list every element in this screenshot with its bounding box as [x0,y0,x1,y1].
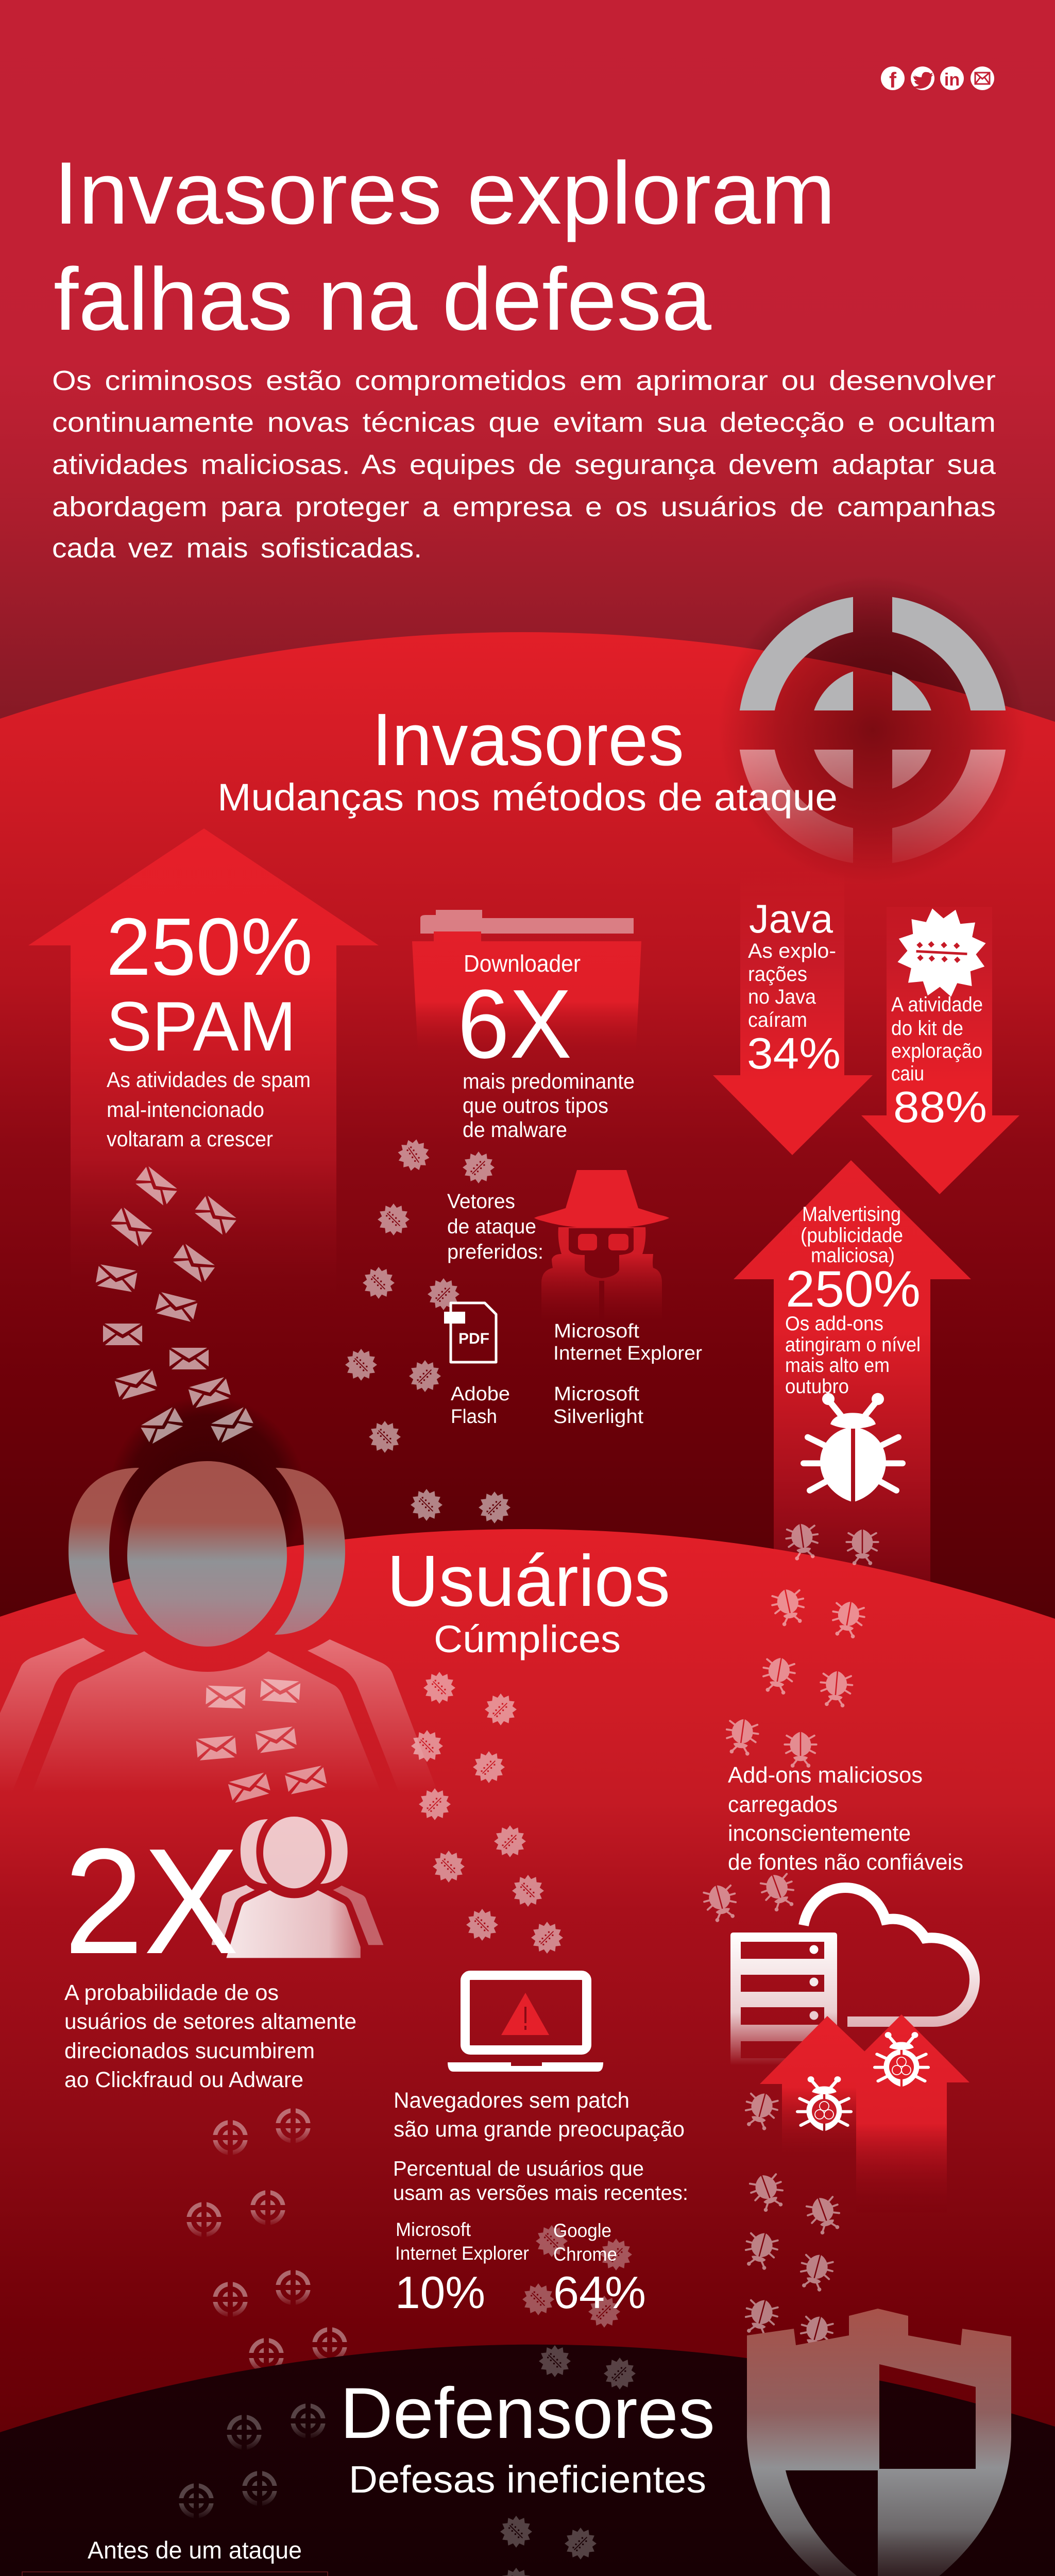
add-ons text: carregados [728,1792,838,1817]
malvertising stat: 250% [786,1260,921,1317]
java stat: As explo- [748,940,836,962]
background: top section [0,0,1055,773]
intro paragraph: atividades maliciosas. As equipes de segurança devem adaptar sua [52,449,996,480]
attack vectors text: preferidos: [447,1241,543,1263]
shadow behind user head [109,1396,305,1592]
small targets: defenders section [179,2403,326,2518]
bug behind shield [796,2313,836,2355]
browsers text: Percentual de usuários que [393,2157,644,2180]
arrow: java down [713,871,873,1155]
browsers text: usam as versões mais recentes: [393,2181,688,2205]
heading: Invasores: Invasores [372,698,684,781]
add-ons text: inconscientemente [728,1821,911,1846]
add-ons text [728,1762,963,1875]
browsers text: 64% [553,2267,646,2318]
spam stat: SPAM [106,987,296,1065]
viruses: defenders section [500,2345,636,2576]
downloader stat [457,950,635,1142]
malvertising stat: mais alto em [785,1354,890,1377]
panel: before attack [22,2536,328,2576]
icon: hacker [534,1170,669,1322]
browsers text [393,2088,688,2318]
social icons top: in [944,70,960,90]
heading: Usuários: Usuários [387,1540,670,1621]
stat: 2X: ao Clickfraud ou Adware [64,2067,303,2092]
target shadow on dark background [718,575,1027,885]
icon: biohazard bug A [797,2076,851,2131]
add-ons text: de fontes não confiáveis [728,1850,963,1875]
intro paragraph: Os criminosos estão comprometidos em aprimorar ou desenvolver [52,365,996,396]
downloader stat: mais predominante [463,1069,635,1093]
icon: crosshair target [740,597,1006,863]
icon: small user figure [212,1817,383,1958]
malvertising stat: (publicidade [801,1224,903,1247]
title: falhas na defesa [54,250,711,349]
intro paragraph [52,365,996,564]
spam stat: voltaram a crescer [107,1127,273,1151]
arrow: spam up [28,828,379,1298]
heading: Invasores: Mudanças nos métodos de ataque [217,776,838,819]
malvertising stat [785,1203,921,1398]
browsers text: Chrome [553,2244,617,2265]
browsers text: Internet Explorer [395,2243,529,2264]
exploit kit stat: 88% [893,1083,987,1132]
attack vectors text: Microsoft [554,1383,639,1405]
heading: before: Antes de um ataque [88,2536,302,2564]
bugs: users section [701,1522,878,2339]
icon: folder [412,910,641,1059]
browsers text: Microsoft [396,2219,471,2240]
background: users dome [0,1529,1055,2452]
stat: 2X: direcionados sucumbirem [64,2039,315,2063]
attack vectors text [447,1190,702,1428]
envelopes: spam trail [95,1165,254,1445]
add-ons text: Add-ons maliciosos [728,1762,923,1788]
browsers text: 10% [395,2267,485,2318]
heading: Invasores [217,698,838,819]
java stat: caíram [748,1009,807,1031]
malvertising stat: atingiram o nível [785,1334,921,1356]
target shadow on dome [718,575,1027,885]
stat: 2X: usuários de setores altamente [64,2009,356,2034]
attack vectors text: Microsoft [554,1320,639,1342]
viruses: users section [411,1672,563,1954]
exploit kit stat [891,993,987,1132]
malvertising stat: maliciosa) [811,1244,895,1267]
icon: pdf file [444,1303,496,1362]
stat: 2X: A probabilidade de os [64,1980,279,2005]
downloader stat: Downloader [464,950,581,977]
java stat: no Java [748,986,816,1008]
java stat [747,896,841,1078]
attack vectors text: Silverlight [553,1406,643,1428]
malvertising stat: outubro [785,1376,849,1398]
malvertising stat: Os add-ons [785,1313,883,1335]
icon: server and cloud [730,1888,975,2065]
intro paragraph: continuamente novas técnicas que evitam sua detecção e ocultam [52,407,996,438]
title: Invasores exploram [54,144,836,243]
heading: Usuários: Cúmplices [434,1618,621,1660]
downloader stat: de malware [463,1117,567,1142]
heading: Defensores: Defensores [340,2372,715,2453]
browsers text: Navegadores sem patch [394,2088,629,2113]
attack vectors text: Flash [451,1406,497,1428]
heading: Defensores [340,2372,715,2501]
icon: laptop with warning [448,1975,603,2072]
stat: 2X: 2X [64,1817,239,1985]
icon: biohazard bug B [875,2032,928,2087]
social icons top [881,66,994,92]
icon: exploit kit virus [878,889,1006,1016]
java stat: rações [748,963,807,986]
arrows: malicious add-ons up [760,2014,969,2213]
background: attackers dome [0,632,1055,1649]
icon: big user figure [0,1461,438,1793]
spam stat [106,902,313,1151]
viruses: over browser percentages [522,2225,632,2328]
exploit kit stat: A atividade [891,993,983,1016]
attack vectors text: Internet Explorer [553,1343,702,1364]
malvertising stat: Malvertising [802,1203,901,1226]
intro paragraph: cada vez mais sofisticadas. [52,533,422,564]
intro paragraph: abordagem para proteger a empresa e os usuários de campanhas [52,492,996,522]
arrow: malvertising up [734,1160,971,1597]
exploit kit stat: caiu [891,1062,924,1085]
heading: Usuários [387,1540,670,1660]
java stat: 34% [747,1029,841,1078]
background: defenders dome [0,2345,1055,2576]
heading: Defensores: Defesas ineficientes [349,2458,706,2501]
spam stat: As atividades de spam [107,1067,311,1092]
icon: castle shield [747,2309,1011,2576]
viruses: attackers section [345,1137,511,1523]
attack vectors text: Adobe [451,1383,510,1405]
icon: pdf file: PDF [458,1330,489,1347]
arrow: exploit kit down [861,907,1019,1194]
browsers text: Google [553,2220,611,2241]
downloader stat: que outros tipos [463,1093,608,1117]
social icons top: f [889,68,897,92]
attack vectors text: de ataque [447,1215,536,1238]
java stat: Java [749,896,833,941]
downloader stat: 6X [457,970,572,1079]
spam stat: 250% [106,902,313,992]
attack vectors text: Vetores [447,1190,515,1213]
icon: white bug [804,1393,903,1501]
browsers text: são uma grande preocupação [394,2117,685,2142]
exploit kit stat: exploração [891,1040,982,1062]
stat: 2X [64,1817,356,2092]
spam stat: mal-intencionado [107,1097,264,1122]
title [54,144,836,349]
small targets: users section [186,2108,347,2373]
exploit kit stat: do kit de [891,1017,963,1040]
envelopes: on user figure [196,1679,328,1803]
